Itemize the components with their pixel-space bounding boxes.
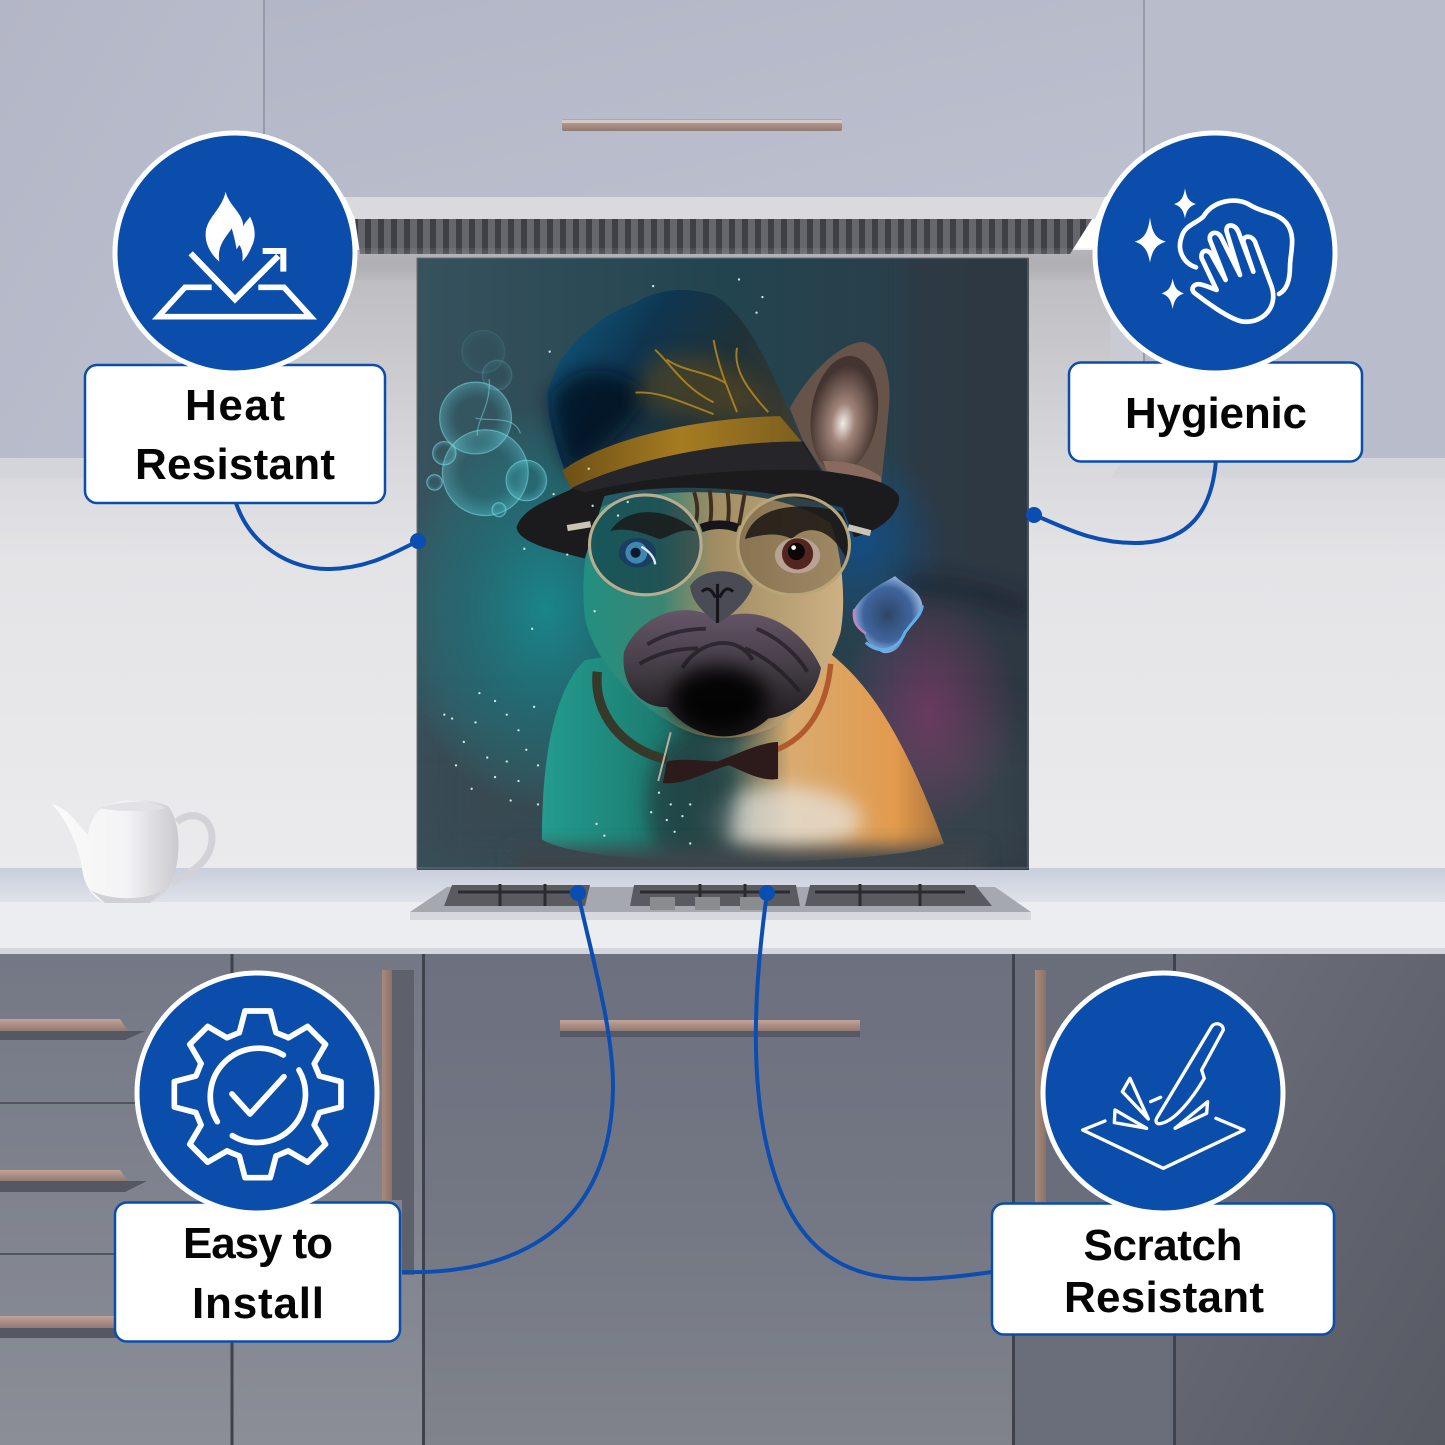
countertop back	[0, 868, 1445, 902]
extractor hood trim	[345, 197, 1105, 219]
connector: easy to install	[402, 885, 613, 1272]
under-cabinet strip right	[1110, 458, 1445, 478]
label box	[1069, 362, 1362, 462]
icon: gear with check mark	[174, 1011, 341, 1178]
left lens	[590, 495, 701, 595]
label text: Resistant	[1064, 1273, 1264, 1322]
muzzle folds	[639, 629, 807, 691]
head	[583, 492, 843, 738]
vertical handle right	[1035, 970, 1046, 1203]
cabinet gaps	[0, 1103, 231, 1254]
muzzle	[623, 610, 821, 736]
feature: easy to install	[115, 973, 400, 1342]
extractor vent	[355, 219, 1092, 254]
forehead wrinkles	[694, 490, 745, 525]
icon: knife scratching surface	[1083, 1024, 1244, 1168]
hat gold splash	[636, 340, 768, 417]
icon circle	[1095, 133, 1335, 373]
vertical handle shadow	[392, 970, 414, 1275]
smoky glows	[397, 219, 1073, 909]
art background	[417, 258, 1029, 870]
drawer handle 1	[0, 1019, 145, 1040]
artwork: french bulldog with hat and glasses	[417, 258, 1029, 870]
hat brim	[517, 441, 899, 559]
teapot	[52, 800, 212, 903]
centre handle	[560, 1020, 860, 1037]
countertop front	[0, 902, 1445, 952]
temples	[567, 524, 871, 533]
collar	[597, 664, 831, 781]
feature: hygienic	[1069, 133, 1362, 462]
cabinet side shading	[1110, 255, 1143, 458]
bridge	[701, 525, 738, 528]
right eye	[775, 537, 820, 573]
connector: scratch resistant	[756, 885, 992, 1279]
label text: Scratch	[1084, 1221, 1242, 1270]
lower cabinet: fourth	[1015, 954, 1173, 1445]
shadow under hood	[265, 254, 1110, 274]
art panel edge	[417, 258, 1028, 868]
upper cabinet: right gap	[1143, 197, 1145, 458]
bow tie	[663, 742, 778, 783]
icon circle	[115, 133, 355, 373]
label text: Install	[192, 1279, 324, 1328]
hat band	[562, 416, 801, 488]
chest fur	[706, 787, 862, 853]
label box	[992, 1204, 1334, 1334]
wall	[0, 250, 1445, 875]
smoke at the base	[515, 847, 983, 886]
lower cabinet: centre	[425, 954, 1012, 1445]
label text: Heat	[185, 381, 285, 430]
chin shadow	[671, 666, 768, 732]
cooktop	[410, 884, 1031, 920]
drawer handle 2	[0, 1170, 147, 1192]
hat lower band	[571, 441, 821, 492]
cabinet gap backing	[0, 0, 1445, 197]
nose	[690, 571, 753, 623]
label box	[115, 1202, 400, 1342]
lower cabinet: right	[1176, 954, 1445, 1445]
left brow	[610, 512, 696, 539]
hat dark shade	[551, 370, 647, 475]
connector: heat resistant	[236, 503, 426, 569]
icon: hand wiping with sparkles	[1135, 188, 1292, 322]
under-cabinet strip left	[0, 458, 90, 478]
label box	[85, 365, 385, 503]
right lens	[738, 495, 849, 595]
upper cabinet: left	[0, 0, 263, 458]
label text: Easy to	[183, 1219, 333, 1268]
frames	[590, 495, 701, 595]
label text: Hygienic	[1125, 389, 1307, 438]
ear	[790, 342, 890, 482]
vertical handle left	[382, 970, 392, 1200]
hat crown	[548, 290, 801, 488]
glasses	[567, 495, 871, 595]
upper cabinet: right	[1145, 0, 1445, 458]
countertop edge	[0, 948, 1445, 954]
connector: hygienic	[1026, 460, 1216, 543]
upper cabinet: centre	[265, 0, 1143, 197]
feature: scratch resistant	[992, 973, 1334, 1334]
icon: flame on surface with arrow	[158, 192, 311, 317]
icon circle	[137, 973, 377, 1213]
left-shadow on chest	[647, 730, 733, 879]
particles	[444, 279, 762, 843]
lower cabinet: left drawers	[0, 954, 231, 1445]
label text: Resistant	[135, 440, 335, 489]
bubble right	[853, 576, 922, 653]
lower cabinet: second	[233, 954, 422, 1445]
centre cabinet handle	[562, 119, 842, 131]
bubbles left	[427, 330, 547, 517]
left eye	[619, 538, 656, 568]
right brow	[745, 507, 849, 559]
dog body	[542, 648, 944, 862]
feature: heat resistant	[85, 133, 385, 503]
icon circle	[1043, 973, 1283, 1213]
drawer handle 3	[0, 1316, 120, 1338]
